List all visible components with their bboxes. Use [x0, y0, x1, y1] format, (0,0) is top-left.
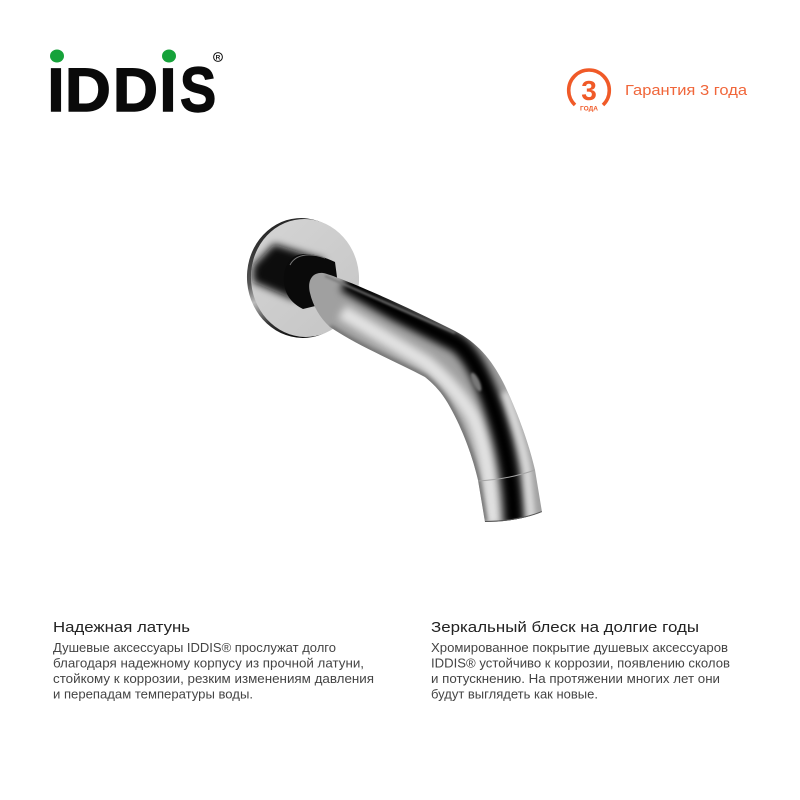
body text: будут выглядеть как новые.	[431, 688, 598, 702]
logo: IDDIS: S	[180, 56, 216, 125]
body text	[53, 641, 374, 702]
body text: Хромированное покрытие душевых аксессуаров	[431, 641, 728, 655]
icon: 3-year warranty badge	[569, 70, 609, 112]
wall plate	[246, 218, 359, 338]
icon: 3-year warranty badge: ГОДА	[580, 106, 598, 112]
body text: стойкому к коррозии, резким изменениям давления	[53, 672, 374, 686]
logo: IDDIS: D	[65, 57, 111, 125]
body text: Душевые аксессуары IDDIS® прослужат долго	[53, 641, 336, 655]
body text: IDDIS® устойчиво к коррозии, появлению сколов	[431, 656, 730, 670]
logo: IDDIS: D	[113, 57, 158, 125]
logo: IDDIS: I	[48, 56, 64, 124]
logo: IDDIS: I	[160, 56, 176, 124]
logo: IDDIS: R	[216, 54, 221, 62]
body text: благодаря надежному корпусу из прочной латуни,	[53, 656, 364, 670]
body text: и перепадам температуры воды.	[53, 688, 253, 702]
panel: reliable brass	[53, 619, 374, 702]
warranty label: Гарантия 3 года	[625, 82, 748, 99]
collar	[284, 254, 340, 309]
product image: chrome wall spout	[246, 218, 542, 522]
panel: mirror shine	[431, 619, 730, 702]
icon: 3-year warranty badge: 3	[581, 75, 597, 106]
body text: и потускнению. На протяжении многих лет они	[431, 672, 720, 686]
body text	[431, 641, 730, 702]
heading: Надежная латунь	[53, 619, 190, 636]
spout tube	[309, 272, 542, 522]
heading: Зеркальный блеск на долгие годы	[431, 619, 699, 636]
logo: IDDIS	[48, 50, 222, 125]
